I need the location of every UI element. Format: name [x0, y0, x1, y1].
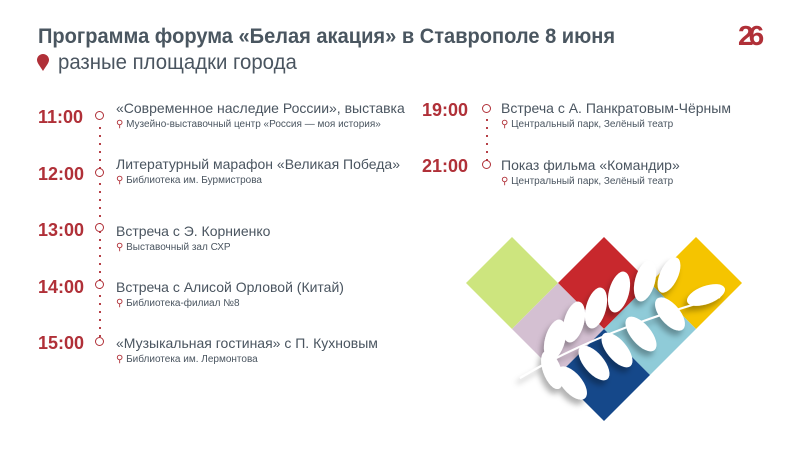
event 21:00: Показ фильма «Командир» [501, 157, 680, 173]
event 12:00: Литературный марафон «Великая Победа» [116, 156, 400, 172]
event 21:00: ⚲ Центральный парк, Зелёный театр [501, 176, 673, 187]
event 12:00 [38, 156, 400, 186]
event 19:00: 19:00 [422, 100, 468, 120]
event 14:00: 14:00 [38, 277, 84, 297]
event 13:00: 13:00 [38, 220, 84, 240]
event 13:00: Встреча с Э. Корниенко [116, 223, 270, 239]
timeline dotted line right [486, 116, 488, 162]
event 14:00: Встреча с Алисой Орловой (Китай) [116, 279, 344, 295]
event 15:00: ⚲ Библиотека им. Лермонтова [116, 354, 258, 365]
event 11:00 [38, 100, 405, 130]
acacia branch [520, 254, 728, 405]
event 14:00: ⚲ Библиотека-филиал №8 [116, 298, 240, 309]
event 15:00 [38, 333, 378, 365]
event 13:00: ⚲ Выставочный зал СХР [116, 242, 231, 253]
event 11:00: 11:00 [38, 107, 83, 127]
event 13:00 [38, 220, 270, 253]
event 19:00: ⚲ Центральный парк, Зелёный театр [501, 119, 673, 130]
event 15:00: «Музыкальная гостиная» с П. Кухновым [116, 335, 378, 351]
event 15:00: 15:00 [38, 333, 84, 353]
event 14:00 [38, 277, 344, 309]
event 12:00: ⚲ Библиотека им. Бурмистрова [116, 175, 262, 186]
event 11:00: ⚲ Музейно-выставочный центр «Россия — моя история» [116, 119, 381, 130]
event 21:00: 21:00 [422, 156, 468, 176]
event 12:00: 12:00 [38, 164, 84, 184]
event 19:00: Встреча с А. Панкратовым-Чёрным [501, 100, 731, 116]
logo 26: 26 [738, 20, 759, 51]
subtitle: разные площадки города [58, 51, 297, 74]
timeline dotted line left [99, 124, 101, 338]
title: Программа форума «Белая акация» в Ставрополе 8 июня [38, 25, 615, 48]
location pin icon [37, 54, 49, 71]
event 19:00 [422, 100, 731, 130]
event 11:00: «Современное наследие России», выставка [116, 100, 405, 116]
event 21:00 [422, 156, 680, 187]
